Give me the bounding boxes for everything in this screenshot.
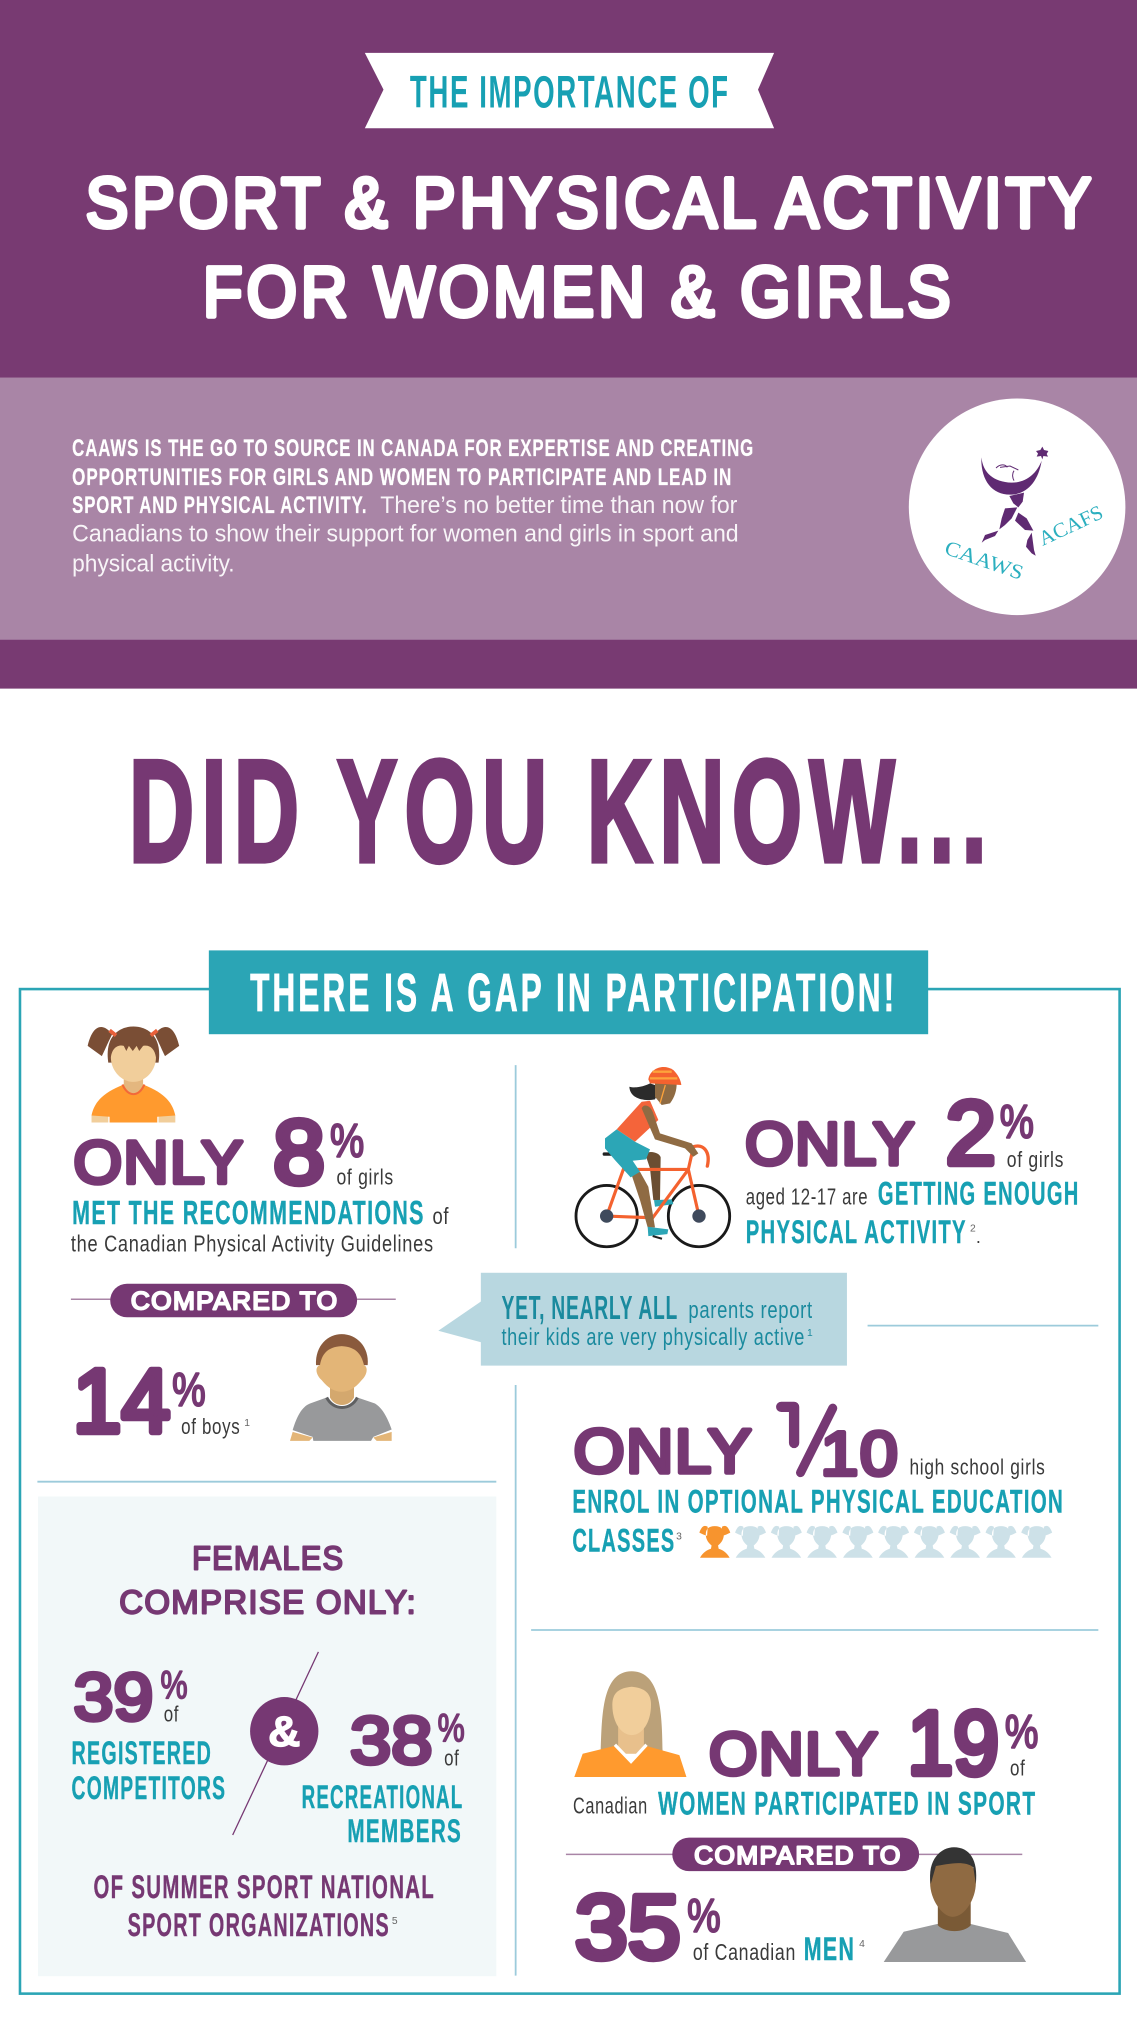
stat: 39% registered competitors [72,1660,226,1806]
intro text: CAAWS IS THE GO TO SOURCE IN CANADA FOR EXPERTISE AND CREATING [72,435,754,462]
lower purple strip [0,640,1137,689]
text: of summer sport organizations: 5 [392,1916,398,1927]
stat: 35% of Canadian men: MEN [804,1931,855,1967]
stat: 38% recreational members: of [444,1745,460,1770]
header band [0,0,1137,378]
icon row: one in ten girls [699,1526,1052,1558]
stat: only 19% of Canadian women: % [1005,1705,1038,1758]
stat: only 2% of girls: . [976,1227,982,1247]
stat: 14% of boys: 14 [73,1351,170,1452]
stat: 38% recreational members: MEMBERS [347,1813,462,1849]
stat: only 8% of girls [71,1102,449,1257]
heading: females comprise only: COMPRISE ONLY: [119,1584,417,1621]
logo: CAAWS ACAFS: CAAWS [942,537,1026,585]
intro text: Canadians to show their support for women and girls in sport and [72,521,739,548]
divider with ampersand badge: & [268,1708,300,1756]
icon: cyclist [576,1067,730,1247]
stat: only 2% of girls: of girls [1007,1147,1064,1172]
heading: females comprise only: FEMALES [192,1540,344,1577]
panel: females comprise only [38,1497,496,1976]
stat: only 1/10 high school girls: ONLY [574,1418,753,1487]
stat: 38% recreational members: 38 [350,1703,432,1778]
stat: only 8% of girls: ONLY [73,1128,244,1196]
banner: the importance of: THE IMPORTANCE OF [410,67,730,118]
intro text: SPORT AND PHYSICAL ACTIVITY. [72,492,367,519]
intro text: There’s no better time than now for [380,492,737,519]
pill: compared to [71,1284,396,1317]
intro text: OPPORTUNITIES FOR GIRLS AND WOMEN TO PARTICIPATE AND LEAD IN [72,464,732,491]
stat: 38% recreational members [302,1703,465,1849]
stat: 38% recreational members: % [438,1708,465,1751]
pill: compared to (women): COMPARED TO [694,1842,902,1870]
stat: only 19% of Canadian women: of [1010,1756,1025,1781]
stat: 39% registered competitors: REGISTERED [72,1735,212,1771]
callout: nearly all parents [438,1273,847,1366]
stat: 14% of boys [73,1351,250,1452]
stat: 14% of boys: 1 [244,1418,250,1429]
stat: 35% of Canadian men [575,1877,865,1978]
stat: only 2% of girls: ONLY [745,1109,916,1177]
stat: only 19% of Canadian women: Canadian [573,1793,648,1819]
stat: only 19% of Canadian women: 19 [908,1693,999,1794]
stat: only 2% of girls: 2 [970,1224,976,1235]
stat: 35% of Canadian men: 35 [575,1877,681,1978]
text: of summer sport organizations: OF SUMMER SPORT NATIONAL [93,1869,435,1905]
text: of summer sport organizations [93,1869,435,1943]
stat: 38% recreational members: RECREATIONAL [302,1779,463,1815]
divider with ampersand badge [233,1652,318,1835]
stat: 39% registered competitors: COMPETITORS [72,1770,226,1806]
intro text: physical activity. [72,550,235,577]
stat: only 2% of girls: PHYSICAL ACTIVITY [746,1214,967,1250]
stat: 35% of Canadian men: % [687,1890,721,1943]
stat: 35% of Canadian men: 4 [859,1939,865,1950]
callout: nearly all parents: their kids are very physically active [501,1324,805,1351]
stat: 39% registered competitors: of [164,1702,179,1727]
callout: nearly all parents: 1 [807,1328,813,1339]
stat: only 8% of girls: 8 [273,1102,325,1203]
stat: only 8% of girls: % [330,1115,364,1168]
stat: only 2% of girls: aged 12-17 are [746,1183,868,1209]
stat: only 19% of Canadian women: ONLY [709,1719,879,1787]
logo: CAAWS ACAFS: ACAFS [1036,502,1107,551]
logo: CAAWS ACAFS [909,398,1125,615]
callout: nearly all parents: YET, NEARLY ALL [501,1290,678,1327]
stat: only 8% of girls: the Canadian Physical Activity Guidelines [71,1230,434,1257]
stat: 39% registered competitors: 39 [73,1660,153,1735]
stat: 39% registered competitors: % [160,1664,188,1707]
stat: 14% of boys: % [172,1364,206,1417]
stat: only 2% of girls: % [1000,1095,1034,1148]
stat: only 8% of girls: MET THE RECOMMENDATIONS [72,1195,425,1232]
stat: only 19% of Canadian women [573,1693,1038,1821]
stat: only 2% of girls: 2 [946,1083,996,1184]
panel: about CAAWS [0,378,1137,640]
intro text [72,435,754,577]
icon: woman [574,1671,686,1777]
stat: only 1/10 high school girls: 10 [821,1420,899,1489]
title: FOR WOMEN & GIRLS [203,253,955,332]
panel frame: gap in participation [20,989,1120,1994]
stat: only 1/10 high school girls: high school girls [909,1455,1045,1480]
icon: man [884,1847,1026,1962]
title [86,164,1095,332]
stat: 14% of boys: of boys [181,1414,240,1439]
stat: only 8% of girls: of girls [336,1164,394,1189]
stat: only 8% of girls: of [432,1203,449,1229]
banner: the importance of [365,53,774,128]
stat: only 2% of girls [745,1083,1080,1250]
stat: only 1/10 high school girls [572,1407,1064,1558]
icon: girl with pigtails [88,1026,179,1123]
stat: 35% of Canadian men: of Canadian [693,1939,796,1965]
text: of summer sport organizations: SPORT ORGANIZATIONS [128,1907,390,1943]
stat: only 1/10 high school girls: CLASSES [572,1522,675,1558]
heading: females comprise only [119,1540,417,1621]
pill: compared to: COMPARED TO [131,1288,338,1316]
callout: nearly all parents: parents report [688,1297,813,1324]
pill: compared to (women) [566,1838,1022,1871]
icon: boy [290,1334,392,1441]
stat: only 1/10 high school girls: 3 [676,1532,682,1543]
panel heading [209,950,928,1034]
